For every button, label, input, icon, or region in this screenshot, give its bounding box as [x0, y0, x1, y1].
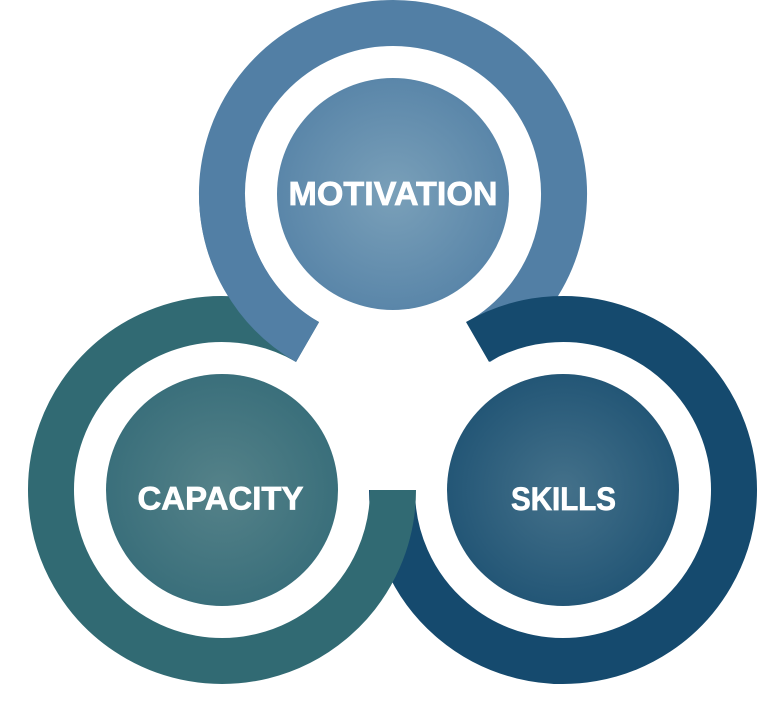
panel: skills	[392, 319, 734, 661]
disc: capacity	[106, 374, 338, 606]
label: skills: SKILLS	[511, 481, 616, 517]
panel: motivation	[222, 23, 564, 342]
label: capacity: CAPACITY	[138, 480, 304, 516]
panel: capacity	[51, 319, 393, 661]
ring segment: motivation end overlapping capacity ring	[222, 194, 308, 342]
disc: motivation	[277, 78, 509, 310]
ring: skills	[392, 319, 734, 661]
ring: motivation	[222, 23, 564, 342]
disc: skills	[447, 374, 679, 606]
label: motivation: MOTIVATION	[288, 175, 498, 212]
ring: capacity	[51, 319, 393, 661]
